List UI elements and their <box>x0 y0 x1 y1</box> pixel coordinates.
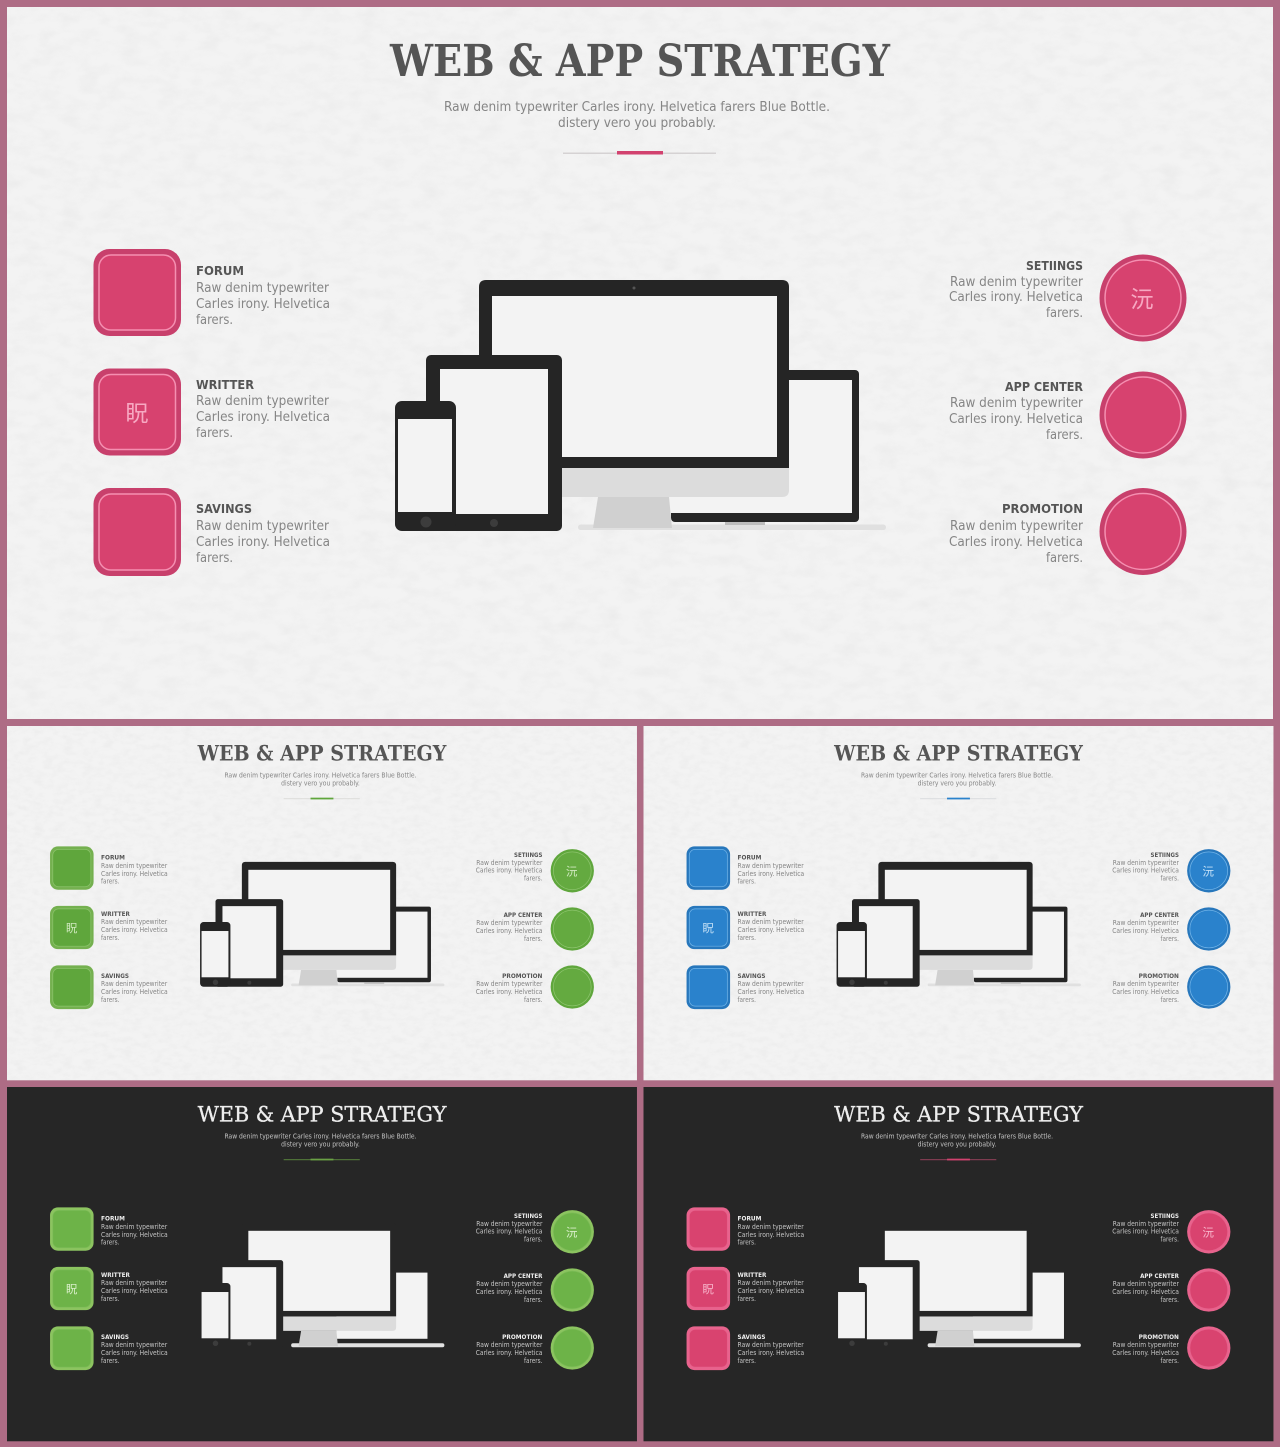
subtitle: Raw denim typewriter Carles irony. Helvetica farers Blue Bottle. <box>224 772 417 780</box>
subtitle: Raw denim typewriter Carles irony. Helvetica farers Blue Bottle. <box>861 1133 1053 1141</box>
subtitle: distery vero you probably. <box>281 1141 360 1149</box>
feature: writter <box>50 906 168 949</box>
feature: writter: Carles irony. Helvetica <box>196 409 330 425</box>
feature: promotion <box>1112 965 1230 1009</box>
feature: savings: SAVINGS <box>196 501 252 516</box>
feature: settings: farers. <box>524 1235 542 1243</box>
feature: savings: SAVINGS <box>101 1334 129 1341</box>
subtitle: distery vero you probably. <box>558 115 716 131</box>
feature: promotion: PROMOTION <box>502 973 542 980</box>
feature: settings: farers. <box>1161 874 1179 882</box>
feature: writter: Carles irony. Helvetica <box>738 1287 804 1295</box>
feature: app center: Carles irony. Helvetica <box>1112 927 1179 935</box>
title: WEB & APP STRATEGY <box>197 740 447 766</box>
panel: blue slide on light background <box>644 726 1273 1080</box>
feature: writter: 眖 <box>702 1281 714 1297</box>
subtitle: Raw denim typewriter Carles irony. Helvetica farers Blue Bottle. <box>224 1133 417 1141</box>
feature: writter: farers. <box>196 425 233 441</box>
feature: app center: Carles irony. Helvetica <box>476 927 542 935</box>
feature: settings: farers. <box>524 874 542 882</box>
feature: savings: farers. <box>738 996 756 1004</box>
feature: promotion: PROMOTION <box>1139 1334 1179 1341</box>
feature: app center <box>949 372 1186 458</box>
subtitle <box>224 772 417 788</box>
feature: savings: Carles irony. Helvetica <box>196 534 330 550</box>
feature: settings: Carles irony. Helvetica <box>1112 1227 1179 1235</box>
feature: app center <box>1112 1268 1230 1312</box>
feature: settings: Raw denim typewriter <box>476 1220 543 1228</box>
feature: forum: farers. <box>738 1239 756 1247</box>
feature: app center: APP CENTER <box>1005 379 1083 394</box>
device illustration <box>200 1223 444 1348</box>
feature: settings: 沅 <box>1203 1224 1215 1240</box>
feature: forum: Carles irony. Helvetica <box>738 870 804 878</box>
feature: savings <box>94 488 330 576</box>
feature: promotion: farers. <box>1046 550 1083 566</box>
feature: savings: Carles irony. Helvetica <box>738 988 804 996</box>
subtitle <box>861 772 1053 788</box>
device illustration <box>837 1223 1081 1348</box>
feature: app center: Carles irony. Helvetica <box>1112 1288 1179 1296</box>
feature: forum <box>50 846 168 890</box>
feature: forum: Raw denim typewriter <box>738 862 804 870</box>
feature: promotion: PROMOTION <box>502 1334 542 1341</box>
feature: settings: Carles irony. Helvetica <box>1112 866 1179 874</box>
feature: app center <box>1112 907 1230 951</box>
feature: promotion: Carles irony. Helvetica <box>1112 1349 1179 1357</box>
feature: settings <box>476 849 594 892</box>
feature: forum <box>687 1207 804 1251</box>
feature: savings: SAVINGS <box>738 1334 766 1341</box>
feature: savings: Raw denim typewriter <box>738 1341 804 1349</box>
panel: large pink slide on light background <box>7 7 1273 719</box>
feature: writter <box>687 906 804 949</box>
feature: forum: Carles irony. Helvetica <box>101 1231 168 1239</box>
feature: writter: 眖 <box>66 1281 78 1297</box>
feature: writter <box>687 1267 804 1310</box>
feature: forum: farers. <box>101 878 119 886</box>
feature: savings: farers. <box>101 1357 119 1365</box>
feature: promotion: Raw denim typewriter <box>1113 1341 1179 1349</box>
feature: promotion: Raw denim typewriter <box>476 1341 543 1349</box>
feature: writter: Raw denim typewriter <box>738 1279 804 1287</box>
feature: promotion: Raw denim typewriter <box>476 980 543 988</box>
feature: forum <box>687 846 804 890</box>
feature: app center: Carles irony. Helvetica <box>949 411 1083 427</box>
feature: settings: SETIINGS <box>1151 1213 1179 1220</box>
subtitle <box>444 99 830 131</box>
title: WEB & APP STRATEGY <box>198 1102 447 1127</box>
panel: pink slide on dark background <box>644 1087 1273 1441</box>
feature: app center <box>476 1268 594 1312</box>
feature: forum: farers. <box>196 312 233 328</box>
feature: promotion: farers. <box>1161 996 1179 1004</box>
feature: writter: Carles irony. Helvetica <box>101 1287 168 1295</box>
feature: writter: Raw denim typewriter <box>738 918 804 926</box>
feature: savings <box>687 965 804 1009</box>
feature: forum: FORUM <box>738 1215 761 1222</box>
feature: promotion: PROMOTION <box>1139 973 1179 980</box>
feature: app center: farers. <box>524 1296 542 1304</box>
feature: app center: APP CENTER <box>504 912 543 919</box>
feature: app center: Raw denim typewriter <box>950 395 1083 411</box>
subtitle: distery vero you probably. <box>281 780 360 788</box>
feature: savings: farers. <box>101 996 119 1004</box>
feature: settings: SETIINGS <box>514 1213 543 1220</box>
feature: writter: Raw denim typewriter <box>101 918 167 926</box>
feature: settings: 沅 <box>1130 280 1154 314</box>
device illustration <box>200 862 444 987</box>
feature: writter: WRITTER <box>101 911 130 918</box>
feature: savings: Raw denim typewriter <box>101 1341 167 1349</box>
feature: forum: Carles irony. Helvetica <box>196 296 330 312</box>
feature: promotion: Raw denim typewriter <box>950 518 1083 534</box>
title: WEB & APP STRATEGY <box>833 740 1083 766</box>
feature: forum: farers. <box>101 1239 119 1247</box>
feature: promotion: PROMOTION <box>1002 501 1083 516</box>
feature: writter: WRITTER <box>196 377 254 392</box>
feature: settings <box>1112 849 1230 892</box>
feature: savings: farers. <box>196 550 233 566</box>
feature: savings <box>687 1326 804 1370</box>
feature: app center: farers. <box>524 935 542 943</box>
feature: settings: Raw denim typewriter <box>1113 1220 1179 1228</box>
feature: writter: 眖 <box>126 394 148 428</box>
feature: writter: Raw denim typewriter <box>196 393 329 409</box>
feature: app center: farers. <box>1161 935 1179 943</box>
title: WEB & APP STRATEGY <box>834 1102 1083 1127</box>
feature: settings: farers. <box>1161 1235 1179 1243</box>
feature: app center: Carles irony. Helvetica <box>476 1288 542 1296</box>
feature: promotion <box>949 488 1186 575</box>
feature: writter: 眖 <box>702 920 714 936</box>
feature: app center: farers. <box>1161 1296 1179 1304</box>
feature: app center: Raw denim typewriter <box>476 1280 543 1288</box>
feature: writter: 眖 <box>66 920 78 936</box>
feature: writter: Carles irony. Helvetica <box>738 926 804 934</box>
feature: savings: farers. <box>738 1357 756 1365</box>
feature: savings: SAVINGS <box>738 973 766 980</box>
feature: app center: farers. <box>1046 427 1083 443</box>
feature: promotion: farers. <box>524 1357 542 1365</box>
feature: savings: Raw denim typewriter <box>738 980 804 988</box>
feature: app center: Raw denim typewriter <box>1113 1280 1179 1288</box>
feature: forum: Raw denim typewriter <box>101 1223 167 1231</box>
feature: promotion: farers. <box>524 996 542 1004</box>
feature: forum: Carles irony. Helvetica <box>738 1231 804 1239</box>
feature: savings <box>50 1326 168 1370</box>
panel: green slide on dark background <box>7 1087 637 1441</box>
feature: promotion <box>1112 1326 1230 1370</box>
feature: settings: SETIINGS <box>1151 852 1179 859</box>
subtitle: distery vero you probably. <box>918 780 996 788</box>
feature: writter: farers. <box>738 1295 756 1303</box>
feature: savings: Raw denim typewriter <box>196 518 329 534</box>
feature: forum <box>94 249 330 336</box>
feature: forum: Raw denim typewriter <box>196 280 329 296</box>
feature: settings: Raw denim typewriter <box>950 274 1083 290</box>
feature: forum: FORUM <box>738 854 761 861</box>
subtitle <box>224 1133 417 1149</box>
feature: savings: Carles irony. Helvetica <box>101 1349 168 1357</box>
feature: settings: SETIINGS <box>514 852 543 859</box>
feature: forum: FORUM <box>101 854 125 861</box>
device illustration <box>395 280 886 531</box>
feature: promotion: Carles irony. Helvetica <box>476 988 542 996</box>
feature: writter: farers. <box>101 934 119 942</box>
feature: settings: farers. <box>1046 305 1083 321</box>
feature: app center: Raw denim typewriter <box>1113 919 1179 927</box>
feature: writter <box>94 368 330 456</box>
feature: settings: Carles irony. Helvetica <box>476 1227 542 1235</box>
feature: promotion <box>476 965 594 1009</box>
feature: promotion: farers. <box>1161 1357 1179 1365</box>
device illustration <box>837 862 1081 987</box>
feature: app center: APP CENTER <box>1140 912 1179 919</box>
feature: forum: Raw denim typewriter <box>738 1223 804 1231</box>
feature: settings: Carles irony. Helvetica <box>476 866 542 874</box>
feature: forum: farers. <box>738 878 756 886</box>
feature: savings: SAVINGS <box>101 973 129 980</box>
feature: settings: 沅 <box>566 1224 578 1240</box>
subtitle: Raw denim typewriter Carles irony. Helvetica farers Blue Bottle. <box>444 99 830 115</box>
feature: writter: farers. <box>101 1295 119 1303</box>
feature: settings <box>1112 1210 1230 1253</box>
feature: writter: Carles irony. Helvetica <box>101 926 168 934</box>
feature: settings: 沅 <box>566 863 578 879</box>
subtitle: Raw denim typewriter Carles irony. Helvetica farers Blue Bottle. <box>861 772 1053 780</box>
feature: app center: APP CENTER <box>504 1273 543 1280</box>
feature: promotion: Raw denim typewriter <box>1113 980 1179 988</box>
feature: settings: Carles irony. Helvetica <box>949 289 1083 305</box>
feature: settings: SETIINGS <box>1026 258 1083 273</box>
feature: app center <box>476 907 594 951</box>
feature: promotion <box>476 1326 594 1370</box>
feature: savings: Carles irony. Helvetica <box>738 1349 804 1357</box>
feature: writter <box>50 1267 168 1310</box>
feature: writter: Raw denim typewriter <box>101 1279 167 1287</box>
feature: promotion: Carles irony. Helvetica <box>476 1349 542 1357</box>
feature: savings <box>50 965 168 1009</box>
feature: promotion: Carles irony. Helvetica <box>949 534 1083 550</box>
feature: writter: WRITTER <box>738 911 767 918</box>
feature: forum: Carles irony. Helvetica <box>101 870 168 878</box>
feature: settings <box>476 1210 594 1253</box>
subtitle <box>861 1133 1053 1149</box>
feature: savings: Raw denim typewriter <box>101 980 167 988</box>
feature: writter: WRITTER <box>101 1272 130 1279</box>
feature: settings <box>949 254 1186 342</box>
title: WEB & APP STRATEGY <box>389 36 891 87</box>
feature: forum: FORUM <box>196 263 244 278</box>
feature: savings: Carles irony. Helvetica <box>101 988 168 996</box>
subtitle: distery vero you probably. <box>918 1141 996 1149</box>
feature: forum: FORUM <box>101 1215 125 1222</box>
feature: settings: Raw denim typewriter <box>476 859 543 867</box>
feature: writter: WRITTER <box>738 1272 767 1279</box>
feature: forum <box>50 1207 168 1251</box>
feature: settings: 沅 <box>1203 863 1215 879</box>
feature: settings: Raw denim typewriter <box>1113 859 1179 867</box>
feature: writter: farers. <box>738 934 756 942</box>
feature: app center: Raw denim typewriter <box>476 919 543 927</box>
feature: forum: Raw denim typewriter <box>101 862 167 870</box>
panel: green slide on light background <box>7 726 637 1080</box>
feature: app center: APP CENTER <box>1140 1273 1179 1280</box>
feature: promotion: Carles irony. Helvetica <box>1112 988 1179 996</box>
